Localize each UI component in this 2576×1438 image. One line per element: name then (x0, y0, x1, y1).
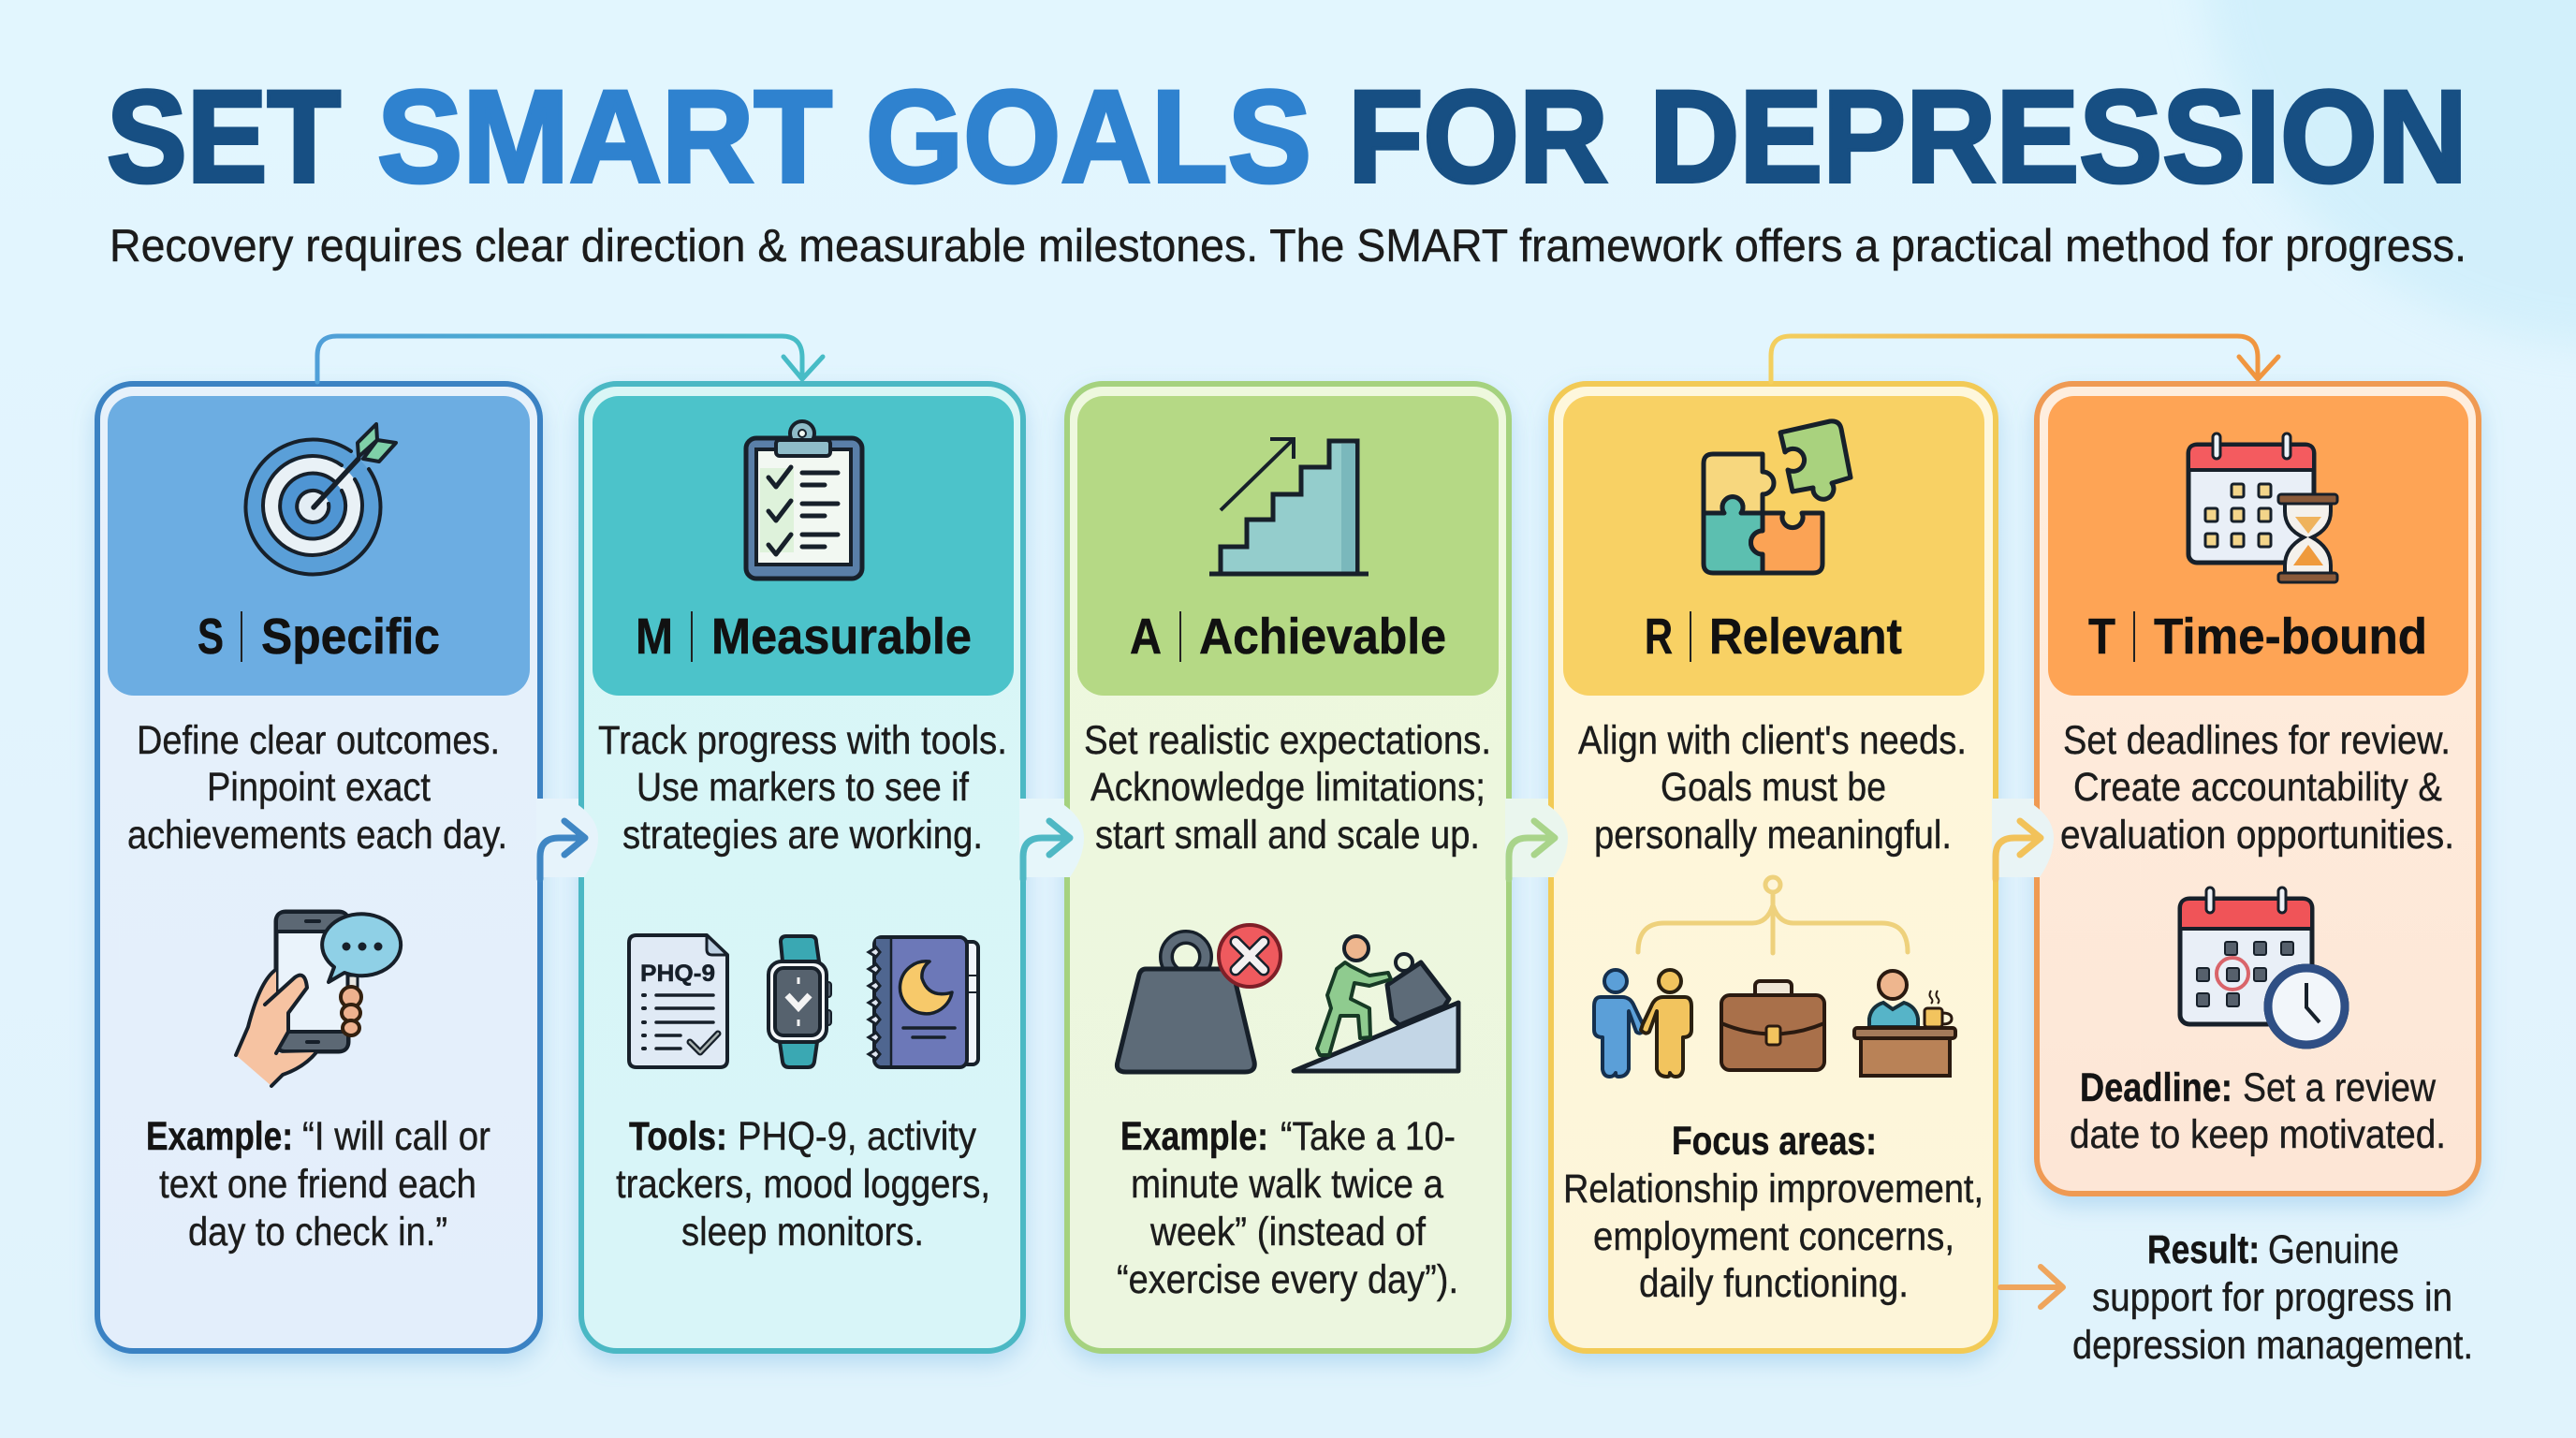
header: T Time-bound: Time-bound (2154, 609, 2427, 665)
header: T Time-bound: T (2088, 609, 2115, 665)
example text: Achievable: minute walk twice a (1131, 1162, 1443, 1207)
header: S Specific (108, 396, 530, 696)
body text: Achievable: Acknowledge limitations; (1090, 765, 1486, 810)
body text: Achievable (1084, 718, 1491, 858)
panel: M Measurable (581, 384, 1023, 1351)
header: T Time-bound (2048, 396, 2468, 696)
tools text (616, 1114, 990, 1255)
example text: Achievable: “exercise every day”). (1117, 1257, 1458, 1302)
title: FOR (1348, 63, 1608, 210)
title: GOALS (866, 63, 1311, 210)
icon: clipboard checklist (746, 421, 862, 579)
icon: PHQ-9 document: PHQ-9 (640, 961, 715, 987)
panel: T Time-bound (2037, 384, 2479, 1194)
body text: Relevant: personally meaningful. (1594, 813, 1952, 858)
title: SMART (377, 63, 832, 210)
icon: heavy weight with X (1117, 925, 1281, 1072)
body text: Time-bound: Set deadlines for review. (2063, 718, 2451, 763)
icon: bracket connector (1638, 877, 1908, 953)
header: R Relevant: Relevant (1709, 609, 1902, 665)
result text: support for progress in (2092, 1275, 2452, 1320)
deadline text: Set a review (2243, 1065, 2437, 1110)
panel: A Achievable (1067, 384, 1509, 1351)
header: M Measurable (593, 396, 1014, 696)
icon: hand holding phone with chat bubble (236, 912, 401, 1086)
header: A Achievable: Achievable (1199, 609, 1446, 665)
example text: Specific: text one friend each (159, 1162, 476, 1207)
tools text: trackers, mood loggers, (616, 1162, 990, 1207)
tools text: PHQ-9, activity (738, 1114, 976, 1159)
icon: calendar with clock (2180, 888, 2348, 1048)
title: SET (107, 63, 341, 210)
focus areas text: Focus areas: (1672, 1119, 1877, 1164)
focus areas text (1563, 1119, 1983, 1306)
body text: Specific (127, 718, 507, 858)
body text: Specific: Pinpoint exact (207, 765, 431, 810)
tools text: sleep monitors. (681, 1210, 924, 1255)
tools text: Tools: (629, 1114, 727, 1159)
body text: Time-bound (2060, 718, 2454, 858)
arrow: A to R side (1505, 799, 1568, 879)
body text: Relevant: Goals must be (1661, 765, 1886, 810)
example text: Specific: “I will call or (302, 1114, 490, 1159)
panel: S Specific (97, 384, 540, 1351)
body text: Specific: Define clear outcomes. (137, 718, 500, 763)
body text: Relevant: Align with client's needs. (1578, 718, 1967, 763)
body text: Time-bound: Create accountability & (2073, 765, 2442, 810)
icon: person at desk with cup (1854, 971, 1955, 1076)
body text: Measurable (598, 718, 1007, 858)
arrow: M to A side (1019, 799, 1084, 879)
focus areas text: daily functioning. (1639, 1261, 1909, 1306)
header: S Specific: S (198, 609, 224, 665)
body text: Specific: achievements each day. (127, 813, 507, 858)
icon: briefcase (1721, 981, 1824, 1070)
icon: smartwatch (768, 936, 831, 1067)
header: R Relevant (1563, 396, 1984, 696)
icon: target with arrow (245, 424, 396, 575)
body text: Relevant (1578, 718, 1967, 858)
arrow: R to T side (1992, 799, 2054, 879)
header: S Specific: Specific (261, 609, 440, 665)
body text: Measurable: strategies are working. (622, 813, 983, 858)
header: M Measurable: M (636, 609, 673, 665)
header: M Measurable: Measurable (711, 609, 972, 665)
result text: depression management. (2072, 1323, 2473, 1368)
focus areas text: employment concerns, (1593, 1214, 1954, 1259)
deadline text (2070, 1065, 2446, 1157)
result text (2072, 1227, 2473, 1368)
icon: calendar with hourglass (2188, 433, 2337, 582)
header: A Achievable (1077, 396, 1499, 696)
header: A Achievable: A (1130, 609, 1162, 665)
icon: PHQ-9 document (629, 935, 727, 1067)
deadline text: date to keep motivated. (2070, 1112, 2446, 1157)
title (107, 63, 2467, 210)
icon: person pushing weight uphill (1294, 936, 1458, 1071)
icon: puzzle pieces (1704, 421, 1851, 573)
arrow: to result (2000, 1267, 2063, 1307)
deadline text: Deadline: (2080, 1065, 2232, 1110)
example text: Achievable: week” (instead of (1149, 1210, 1427, 1255)
title: DEPRESSION (1649, 63, 2467, 210)
arrow: S to M side (536, 799, 598, 879)
result text: Result: (2147, 1227, 2260, 1272)
panel: R Relevant (1551, 384, 1996, 1351)
body text: Time-bound: evaluation opportunities. (2060, 813, 2454, 858)
arrow: S to M over the top (317, 336, 823, 382)
body text: Achievable: Set realistic expectations. (1084, 718, 1491, 763)
example text: Specific: Example: (146, 1114, 293, 1159)
example text: Achievable (1117, 1114, 1458, 1302)
subtitle: Recovery requires clear direction & measurable milestones. The SMART framework offers a practical method for progress. (110, 221, 2466, 271)
body text: Measurable: Track progress with tools. (598, 718, 1007, 763)
example text: Achievable: Example: (1120, 1114, 1268, 1159)
arrow: R to T over the top (1771, 336, 2278, 382)
example text: Specific: day to check in.” (188, 1210, 447, 1255)
header: R Relevant: R (1645, 609, 1673, 665)
example text: Achievable: “Take a 10- (1281, 1114, 1456, 1159)
result text: Genuine (2268, 1227, 2399, 1272)
icon: stairs with rising arrow (1209, 439, 1368, 574)
example text: Specific (146, 1114, 490, 1255)
body text: Achievable: start small and scale up. (1095, 813, 1480, 858)
focus areas text: Relationship improvement, (1563, 1167, 1983, 1211)
icon: sleep journal (869, 937, 978, 1067)
body text: Measurable: Use markers to see if (637, 765, 970, 810)
icon: two people holding hands (1594, 970, 1691, 1077)
